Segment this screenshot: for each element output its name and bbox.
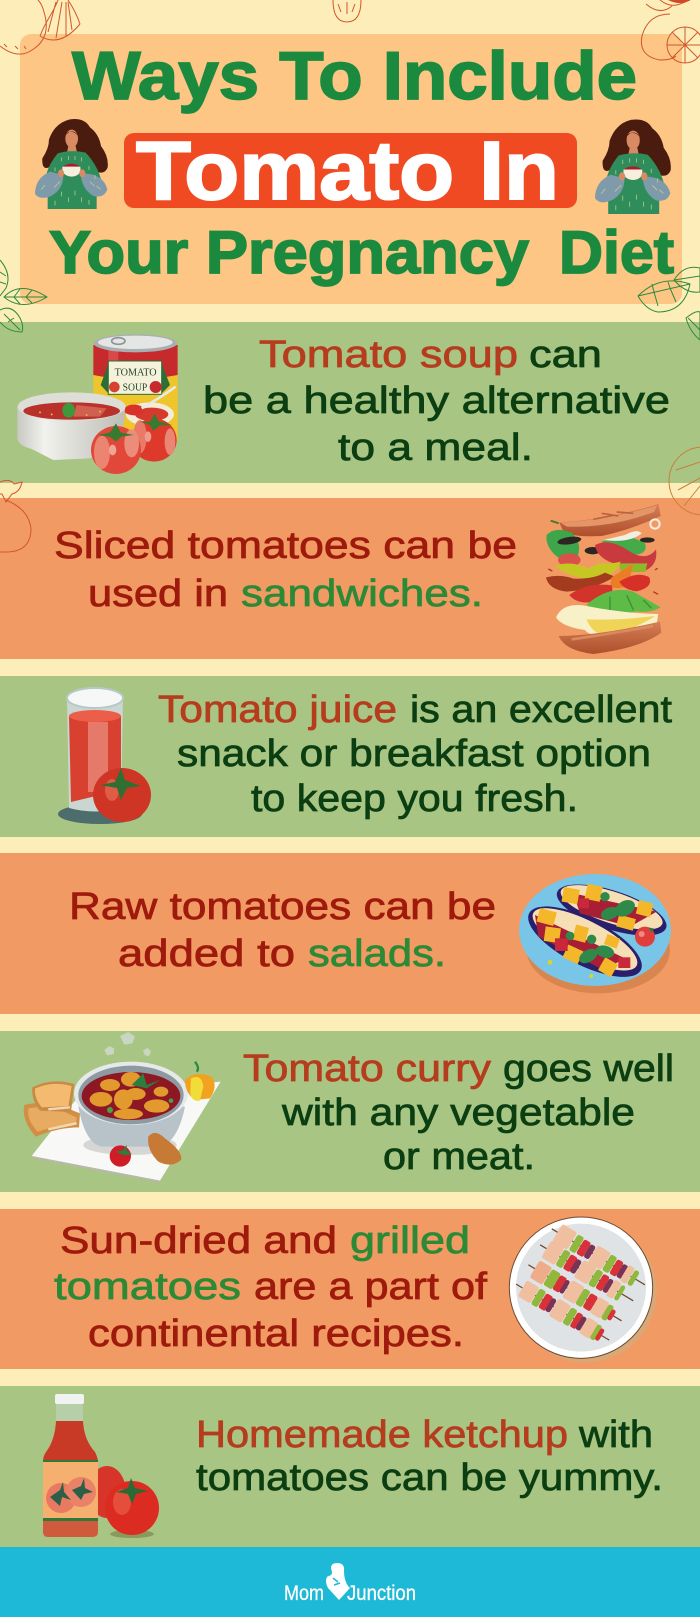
logo: MomJunction: Junction [347, 1582, 416, 1605]
text: tomato juice: Tomato juice [158, 689, 397, 731]
text: homemade ketchup: Homemade ketchup [196, 1414, 568, 1456]
text: tomato curry: with any vegetable [281, 1092, 635, 1134]
text: tomato soup: Tomato soup [259, 334, 518, 376]
sketch: top-middle fruit [333, 0, 361, 22]
text: tomato juice: snack or breakfast option [177, 733, 651, 775]
text: sliced tomatoes: sandwiches. [241, 573, 483, 615]
text: tomato soup: be a healthy alternative [203, 380, 670, 422]
text: sun-dried and grilled tomatoes: tomatoes [54, 1266, 241, 1308]
text: tomato curry: Tomato curry [243, 1048, 491, 1090]
sketch: right leaves [638, 267, 700, 340]
text: sliced tomatoes [54, 525, 517, 615]
band: tomato juice background [0, 676, 700, 837]
text: sun-dried and grilled tomatoes: Sun-dried and [60, 1220, 337, 1262]
text: tomato curry: or meat. [383, 1136, 535, 1178]
band: tomato curry background [0, 1031, 700, 1192]
text: tomato soup: can [529, 334, 602, 376]
sketch: left tomato outline [0, 480, 31, 552]
text: raw tomatoes: salads. [308, 933, 446, 975]
text: raw tomatoes: Raw tomatoes can be [69, 886, 496, 928]
text: raw tomatoes [69, 886, 496, 975]
text: homemade ketchup: with [578, 1414, 653, 1456]
sketch: left leaves [0, 260, 47, 332]
sketch: top-right fruits [641, 0, 700, 63]
icon: stuffed aubergine salad plate [519, 874, 672, 993]
logo: MomJunction: Mom [284, 1582, 324, 1605]
text: homemade ketchup [196, 1414, 663, 1499]
text: sliced tomatoes: used in [88, 573, 228, 615]
band: tomato soup background [0, 322, 700, 483]
icon: flying sandwich [546, 504, 661, 654]
icon: tomato curry bowl with bread [24, 1032, 221, 1183]
title line: Your Pregnancy Diet: Your Pregnancy [49, 219, 530, 286]
text: tomato juice: to keep you fresh. [251, 778, 578, 820]
text: tomato juice: is an excellent [410, 689, 672, 731]
text: tomato curry [243, 1048, 674, 1178]
band: salads background [0, 853, 700, 1014]
icon: ketchup bottle with tomatoes [43, 1394, 159, 1538]
footer bar [0, 1547, 700, 1617]
text: homemade ketchup: tomatoes can be yummy. [196, 1457, 663, 1499]
text: sun-dried and grilled tomatoes [54, 1220, 487, 1355]
icon: woman holding bowl, right [595, 119, 671, 214]
logo: MomJunction [284, 1563, 416, 1605]
icon: kebab skewers on plate [509, 1217, 657, 1362]
text: sun-dried and grilled tomatoes: are a part of [254, 1266, 487, 1308]
icon: glass of tomato juice with tomato [58, 688, 151, 824]
header panel [20, 34, 682, 304]
text: raw tomatoes: added to [118, 933, 295, 975]
text: sun-dried and grilled tomatoes: continental recipes. [88, 1313, 464, 1355]
title line: Ways To Include: Ways To Include [72, 38, 637, 114]
icon: tomato soup can, bowl and tomatoes: SOUP [123, 382, 148, 393]
icon: woman holding bowl, left [35, 119, 108, 209]
band: sandwiches background [0, 498, 700, 659]
title line: Your Pregnancy Diet: Diet [559, 219, 674, 286]
text: tomato juice [158, 689, 672, 820]
title highlight: Tomato In: Tomato In [136, 124, 559, 217]
band: ketchup background [0, 1386, 700, 1547]
text: sun-dried and grilled tomatoes: grilled [350, 1220, 470, 1262]
icon: tomato soup can, bowl and tomatoes [17, 334, 178, 474]
text: tomato soup: to a meal. [338, 427, 533, 469]
sketch: top-left fruits [0, 0, 80, 54]
icon: tomato soup can, bowl and tomatoes: TOMATO [115, 368, 157, 379]
text: tomato soup [203, 334, 670, 469]
text: tomato curry: goes well [503, 1048, 674, 1090]
sketch: right citrus slice [669, 447, 700, 515]
text: sliced tomatoes: Sliced tomatoes can be [54, 525, 517, 567]
band: grilled tomatoes background [0, 1209, 700, 1369]
